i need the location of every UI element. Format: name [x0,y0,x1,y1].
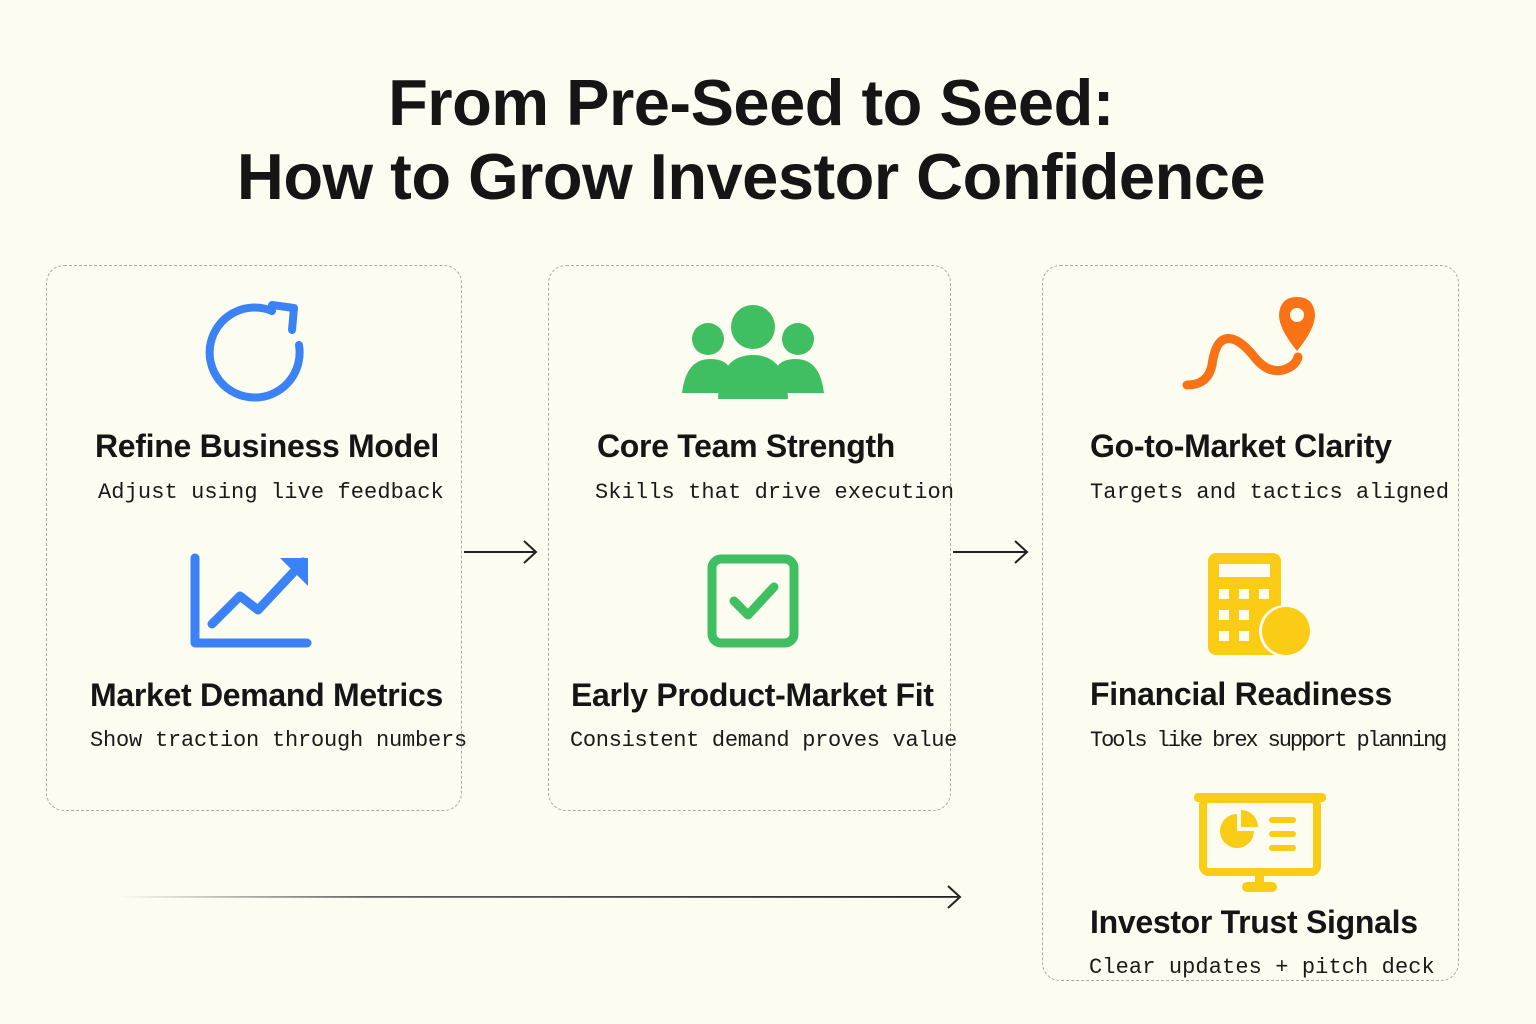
arrow: long [131,885,962,909]
heading: gtm: Go-to-Market Clarity [1090,428,1392,464]
text: pmf: Consistent demand proves value [570,728,957,753]
heading: trust: Investor Trust Signals [1090,904,1418,940]
text: gtm: Targets and tactics aligned [1090,480,1449,505]
text: market: Show traction through numbers [90,728,467,753]
text: financial: Tools like brex support planning [1090,728,1445,753]
icon: team [682,305,824,399]
icon: checkbox [708,554,798,648]
icon: route [1182,297,1315,390]
icon: refresh [206,301,304,402]
panel: stage 3 [1042,265,1459,981]
panel: stage 1 [46,265,462,811]
icon: presentation [1194,793,1326,892]
arrow 1 [464,540,538,564]
text: team: Skills that drive execution [595,480,954,505]
title: How to Grow Investor Confidence [237,140,1265,213]
arrow 2 [953,540,1028,564]
heading: pmf: Early Product-Market Fit [571,677,934,713]
text: trust: Clear updates + pitch deck [1089,955,1435,980]
icon: calculator [1208,553,1310,655]
title [237,66,1265,213]
panel: stage 2 [548,265,951,811]
heading: financial: Financial Readiness [1090,676,1392,712]
icon: chart [190,554,312,648]
heading: market: Market Demand Metrics [90,677,443,713]
heading: refine: Refine Business Model [95,428,439,464]
heading: team: Core Team Strength [597,428,895,464]
title: From Pre-Seed to Seed: [388,66,1114,139]
text: refine: Adjust using live feedback [98,480,444,505]
